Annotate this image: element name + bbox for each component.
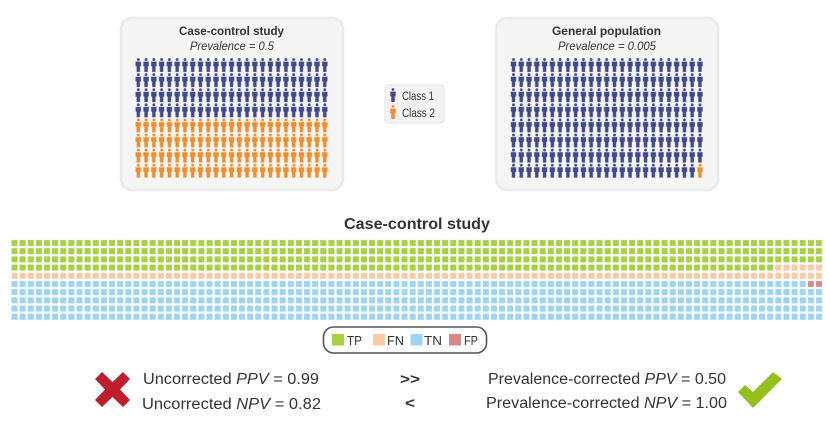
text: uncorrected NPV: Uncorrected NPV = 0.82 — [142, 396, 321, 413]
swatch: TP — [332, 334, 344, 346]
label: FN: FN — [387, 333, 404, 348]
pictogram: single class 2 person — [697, 164, 703, 178]
icon: class 2 person — [390, 105, 396, 119]
panel heading: general population: General population — [552, 24, 661, 38]
swatch: FN — [373, 334, 385, 346]
text: uncorrected PPV: Uncorrected PPV = 0.99 — [143, 371, 319, 388]
comparison: much greater than: >> — [400, 371, 420, 388]
label: class 1: Class 1 — [402, 91, 434, 103]
pictogram: class 1 people — [134, 57, 329, 118]
panel: case-control study — [121, 18, 343, 190]
label: TN: TN — [424, 333, 442, 348]
label: TP: TP — [347, 333, 362, 348]
comparison: less than: < — [405, 395, 415, 412]
waffle: true negatives — [10, 280, 823, 321]
icon: red cross — [95, 372, 130, 407]
waffle: true positives — [10, 239, 823, 272]
icon: class 1 person — [390, 88, 396, 102]
text: prevalence-corrected PPV: Prevalence-corrected PPV = 0.50 — [488, 371, 726, 388]
icon: green check mark — [738, 372, 782, 408]
prevalence label: 0.005: Prevalence = 0.005 — [558, 39, 656, 53]
waffle: false negatives — [10, 263, 823, 280]
waffle: false positives — [807, 280, 823, 288]
heading: case-control study: Case-control study — [344, 216, 490, 233]
pictogram: class 1 people — [510, 57, 704, 178]
swatch: FP — [449, 334, 461, 346]
text: prevalence-corrected NPV: Prevalence-corrected NPV = 1.00 — [486, 395, 727, 412]
panel heading: case-control study: Case-control study — [179, 24, 284, 38]
swatch: TN — [410, 334, 422, 346]
legend: classes — [385, 85, 444, 123]
panel: general population — [496, 18, 718, 190]
label: class 2: Class 2 — [402, 108, 435, 120]
legend: outcomes — [324, 327, 486, 353]
waffle chart: classification outcomes — [10, 239, 823, 321]
pictogram: class 2 people — [134, 118, 329, 178]
label: FP: FP — [464, 333, 478, 348]
prevalence label: 0.5: Prevalence = 0.5 — [190, 39, 274, 53]
